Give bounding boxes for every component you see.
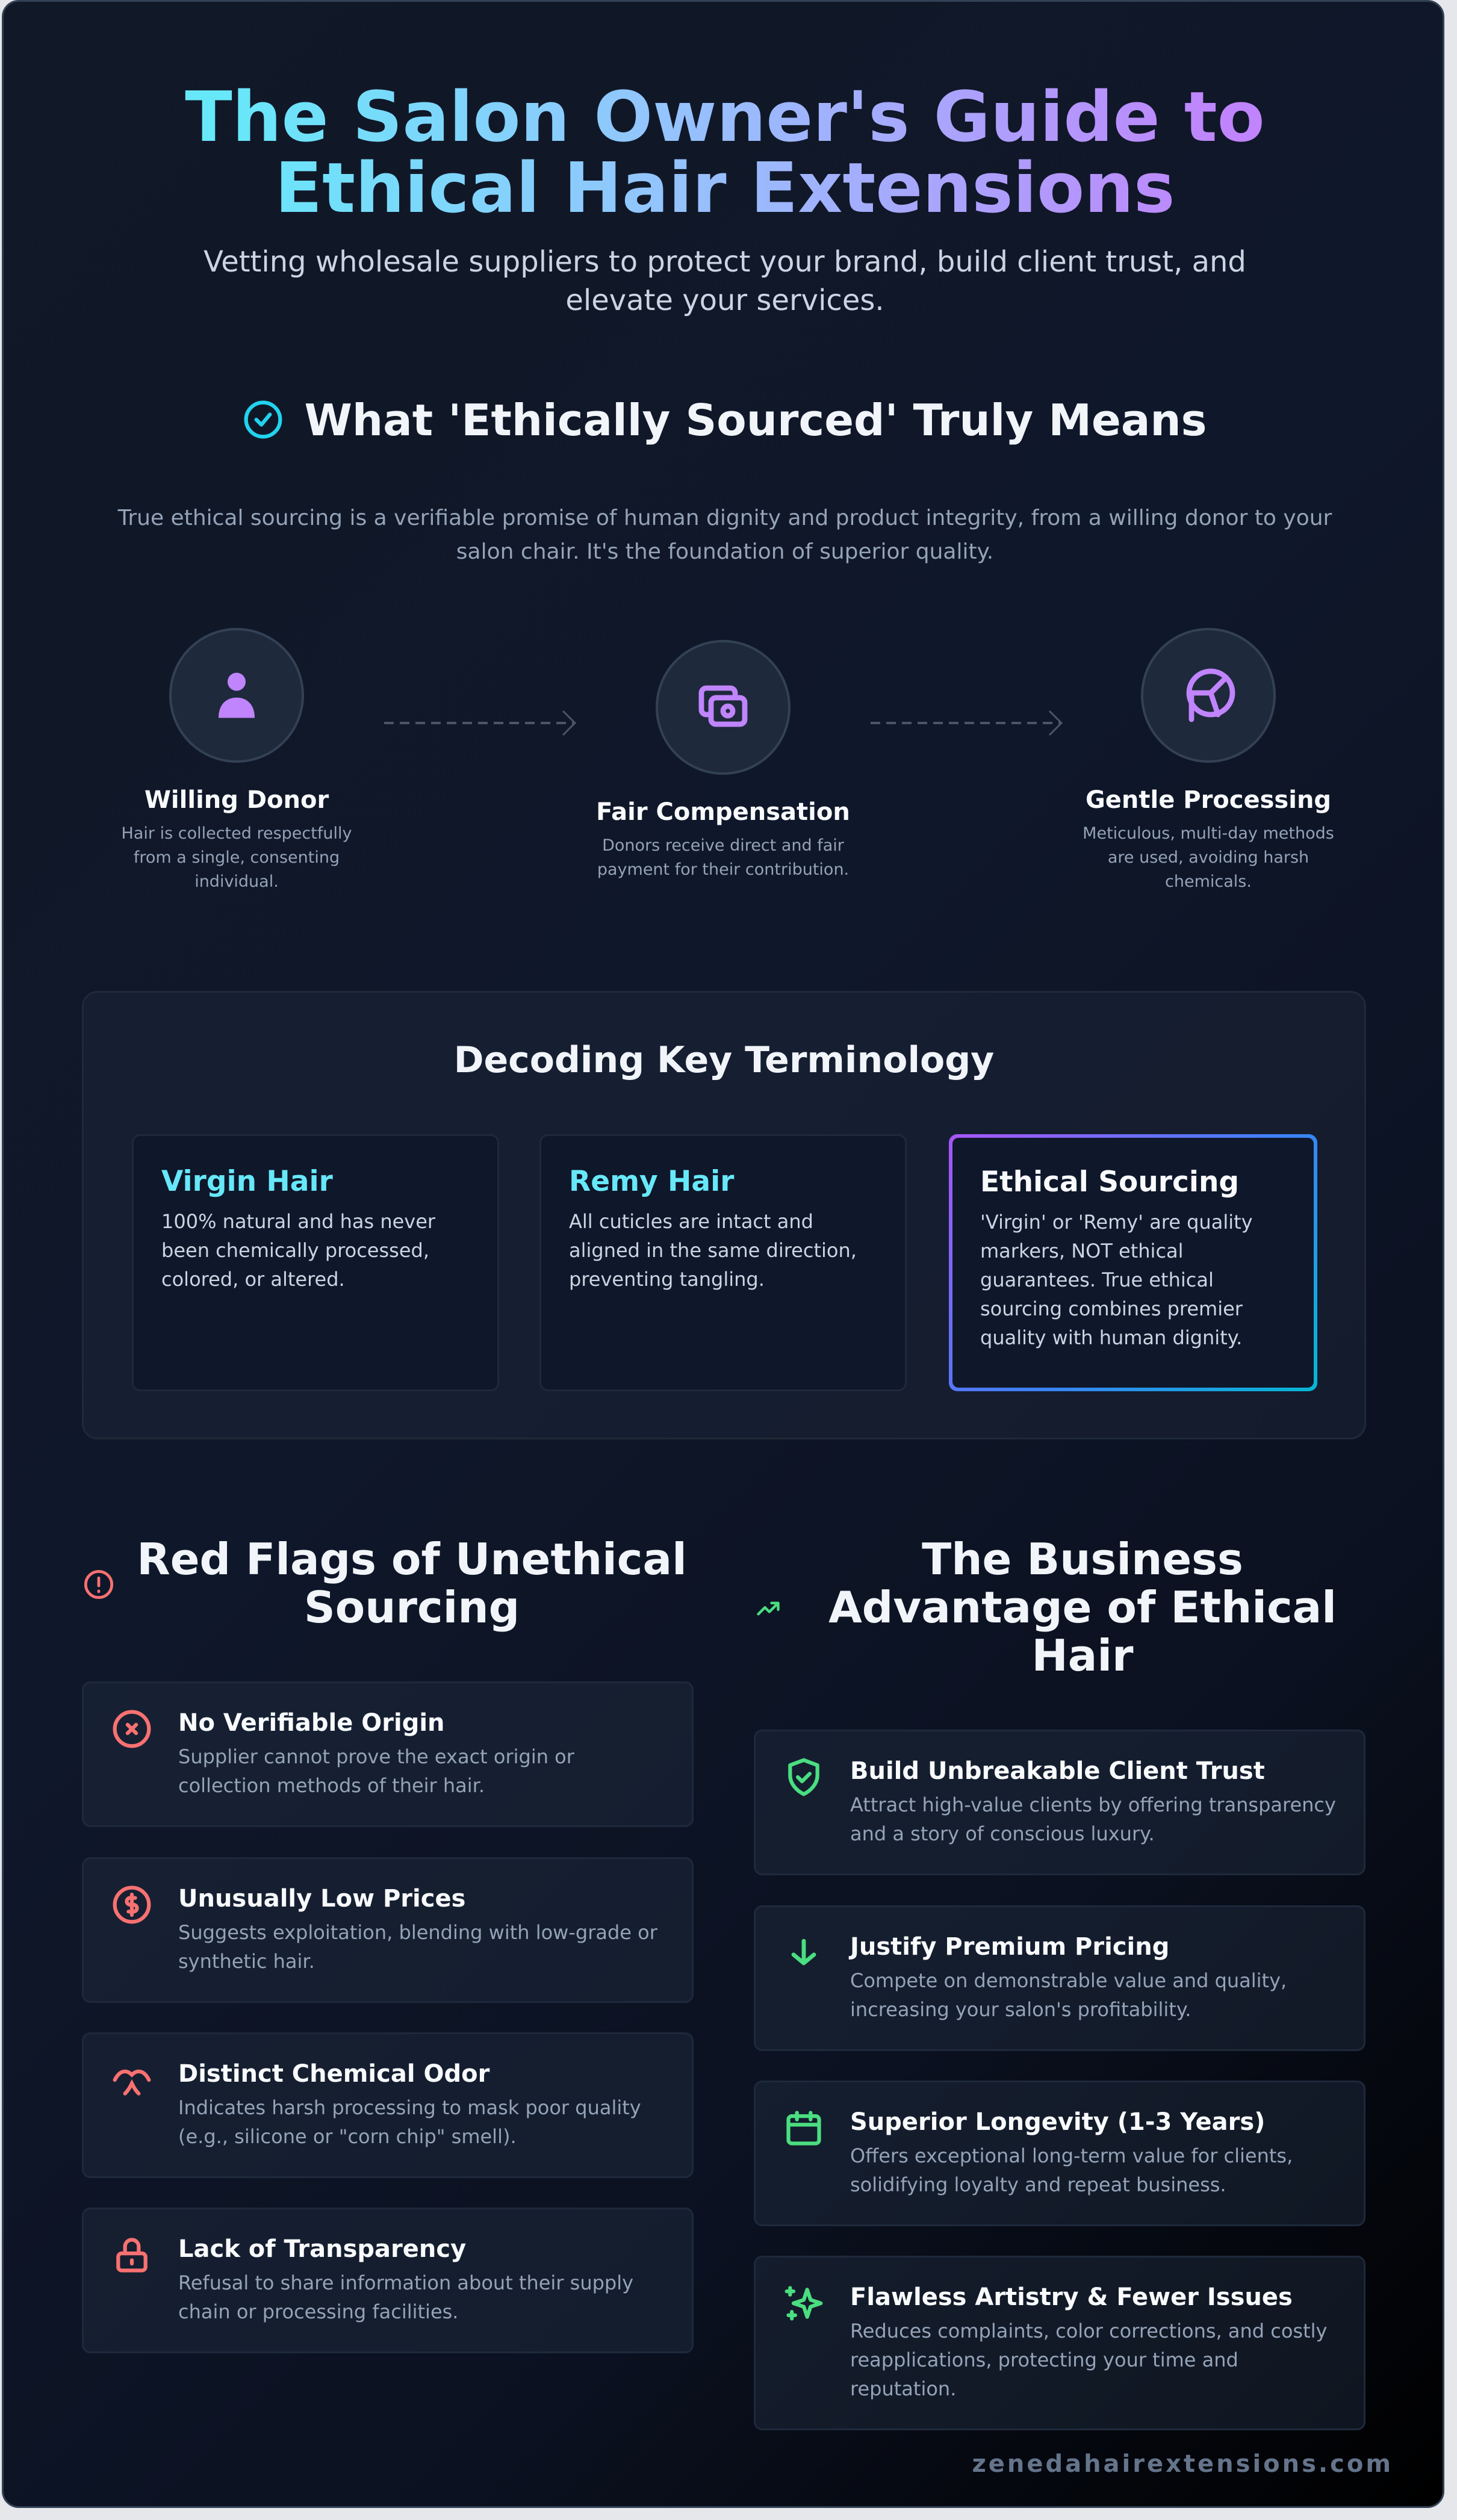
red flag: no verifiable origin: Supplier cannot prove the exact origin or collection methods of their hair.: [178, 1745, 574, 1797]
step: willing donor: [122, 628, 352, 891]
subtitle: Vetting wholesale suppliers to protect your brand, build client trust, and: [203, 245, 1246, 279]
red flag: low prices: Suggests exploitation, blending with low-grade or synthetic hair.: [178, 1921, 657, 1973]
term: remy hair: [539, 1134, 907, 1391]
term: ethical sourcing: [949, 1134, 1317, 1391]
icon: person: [169, 628, 304, 763]
step: fair compensation: Donors receive direct and fair payment for their contribution.: [597, 836, 849, 879]
icon: nose: [113, 2070, 151, 2096]
red flag: no verifiable origin: No Verifiable Origin: [178, 1709, 445, 1737]
benefit: client trust: Attract high-value clients by offering transparency and a story of conscious luxury.: [850, 1793, 1336, 1845]
icon: leaf/fan: [1141, 628, 1276, 763]
heading: business advantage: Hair: [1031, 1630, 1134, 1681]
term: ethical sourcing: 'Virgin' or 'Remy' are quality markers, NOT ethical guarantees. True ethical sourcing combines premier quality with human dignity.: [980, 1211, 1253, 1349]
title: Ethical Hair Extensions: [275, 148, 1175, 229]
heading: red flags: [84, 1534, 687, 1633]
heading: red flags: Sourcing: [304, 1582, 520, 1633]
subtitle: elevate your services.: [565, 284, 884, 317]
heading: red flags: Red Flags of Unethical: [137, 1534, 687, 1584]
step: gentle processing: [1083, 628, 1334, 891]
benefit: flawless artistry: Reduces complaints, color corrections, and costly reapplications, protecting your time and reputation.: [850, 2320, 1327, 2400]
footer: website: zenedahairextensions.com: [972, 2450, 1393, 2478]
title: [4, 82, 1446, 224]
icon: alert: [84, 1570, 113, 1599]
icon: sparkles: [785, 2286, 822, 2321]
benefit: flawless artistry: [754, 2256, 1365, 2430]
heading: business advantage: [757, 1534, 1337, 1681]
red flag: no verifiable origin: [82, 1681, 694, 1827]
icon: coin: [113, 1885, 151, 1924]
benefit: longevity: Offers exceptional long-term value for clients, solidifying loyalty and repeat business.: [850, 2144, 1293, 2196]
step: willing donor: Hair is collected respectfully from a single, consenting individual.: [122, 824, 352, 891]
term: virgin hair: Virgin Hair: [161, 1165, 333, 1198]
arrow: [871, 710, 1063, 736]
step: gentle processing: Gentle Processing: [1086, 786, 1331, 814]
benefit: premium pricing: Justify Premium Pricing: [850, 1933, 1169, 1961]
benefit: premium pricing: Compete on demonstrable value and quality, increasing your salon's profitability.: [850, 1969, 1287, 2021]
icon: shield: [788, 1758, 819, 1796]
term: remy hair: All cuticles are intact and aligned in the same direction, preventing tangling.: [569, 1210, 857, 1291]
red flag: low prices: Unusually Low Prices: [178, 1885, 465, 1913]
term: virgin hair: [132, 1134, 499, 1391]
term: remy hair: Remy Hair: [569, 1165, 734, 1198]
section heading: ethically sourced: What 'Ethically Sourced' Truly Means: [304, 395, 1207, 445]
red flag: transparency: Lack of Transparency: [178, 2235, 466, 2263]
benefit: longevity: [754, 2081, 1365, 2226]
benefit: premium pricing: [754, 1905, 1365, 2051]
red flag: chemical odor: Distinct Chemical Odor: [178, 2060, 489, 2088]
icon: arrow down: [791, 1938, 816, 1965]
panel: terminology: [82, 991, 1366, 1439]
term: virgin hair: 100% natural and has never been chemically processed, colored, or altered.: [161, 1210, 435, 1291]
step: fair compensation: Fair Compensation: [596, 798, 850, 826]
title: The Salon Owner's Guide to: [185, 77, 1265, 158]
red flag: chemical odor: Indicates harsh processing to mask poor quality (e.g., silicone or "corn chip" smell).: [178, 2096, 641, 2148]
benefit: longevity: Superior Longevity (1-3 Years): [850, 2108, 1265, 2136]
step: willing donor: Willing Donor: [144, 786, 329, 814]
intro paragraph: True ethical sourcing is a verifiable promise of human dignity and product integrity, from a willing donor to your salon chair. It's the foundation of superior quality.: [118, 506, 1332, 564]
step: gentle processing: Meticulous, multi-day methods are used, avoiding harsh chemicals.: [1083, 824, 1334, 891]
subtitle: [203, 245, 1246, 317]
benefit: client trust: [754, 1730, 1365, 1875]
icon: trend: [757, 1601, 780, 1616]
arrow: [384, 710, 576, 736]
icon: x circle: [113, 1710, 151, 1748]
red flag: low prices: [82, 1857, 694, 2003]
benefit: flawless artistry: Flawless Artistry & Fewer Issues: [850, 2283, 1293, 2311]
red flag: transparency: [82, 2208, 694, 2353]
icon: money: [656, 640, 791, 775]
benefit: client trust: Build Unbreakable Client Trust: [850, 1757, 1265, 1785]
heading: terminology: Decoding Key Terminology: [454, 1039, 994, 1081]
red flag: transparency: Refusal to share information about their supply chain or processing facilities.: [178, 2271, 633, 2323]
term: ethical sourcing: Ethical Sourcing: [980, 1165, 1239, 1199]
icon: calendar: [786, 2111, 821, 2146]
icon: lock: [116, 2238, 148, 2273]
heading: business advantage: The Business: [922, 1534, 1243, 1584]
step: fair compensation: [596, 640, 850, 879]
red flag: chemical odor: [82, 2032, 694, 2178]
heading: business advantage: Advantage of Ethical: [828, 1582, 1337, 1633]
